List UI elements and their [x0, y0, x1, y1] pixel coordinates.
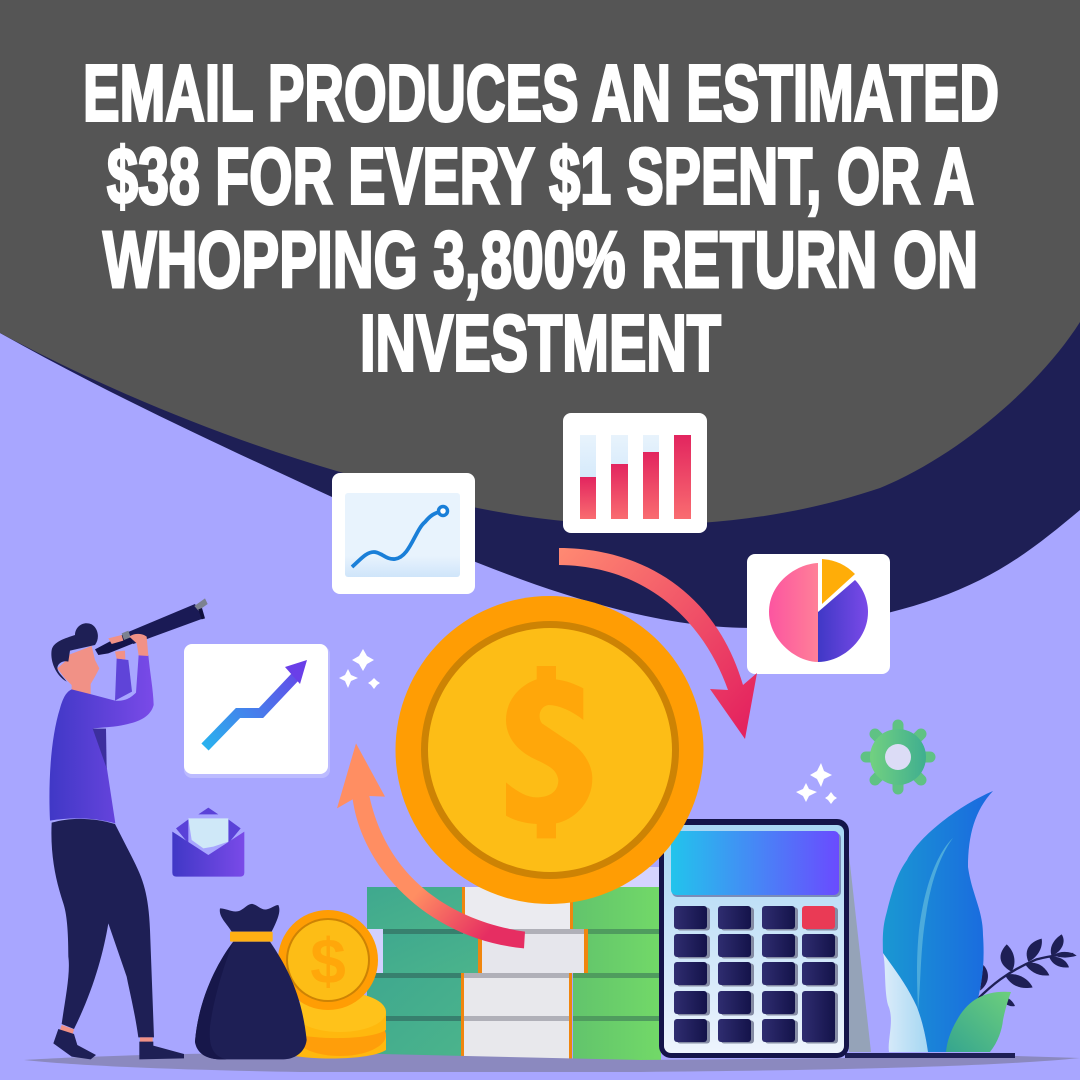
calculator key shadows [677, 908, 838, 1044]
title: INVESTMENT [360, 298, 721, 388]
telescope [95, 598, 208, 655]
head [57, 646, 99, 688]
sparkles right [796, 763, 837, 804]
person with telescope [49, 598, 208, 1059]
card: growth arrow [184, 644, 330, 778]
sparkles left [339, 649, 380, 689]
envelope icon [172, 808, 244, 877]
gear icon [866, 725, 930, 789]
arrow: up left curve [337, 743, 525, 948]
navy wave [0, 300, 1080, 628]
big coin [396, 596, 704, 904]
front hand [129, 634, 148, 656]
plant [883, 791, 1077, 1052]
card: pie chart [747, 554, 890, 674]
grey header shape [0, 0, 1080, 525]
neck [72, 683, 91, 695]
back arm [115, 658, 132, 701]
card: bar chart [563, 413, 707, 533]
ankles [60, 1025, 153, 1042]
money bag [195, 904, 307, 1059]
dollar sign glyph shape on coin [506, 666, 592, 838]
trousers [51, 819, 154, 1037]
title [83, 48, 999, 388]
small coin stack: $ [310, 925, 346, 997]
torso and arm [49, 655, 154, 823]
hair [51, 623, 98, 682]
sprig [977, 934, 1077, 1006]
small coin stack [278, 910, 386, 1058]
calculator keys [674, 906, 835, 1042]
arrow: down right curve [559, 548, 757, 739]
stack of banknotes [367, 867, 661, 1060]
ground shadow [24, 1053, 1080, 1072]
card: line chart [332, 473, 475, 594]
shoes [53, 1029, 96, 1059]
calculator [659, 819, 1015, 1058]
